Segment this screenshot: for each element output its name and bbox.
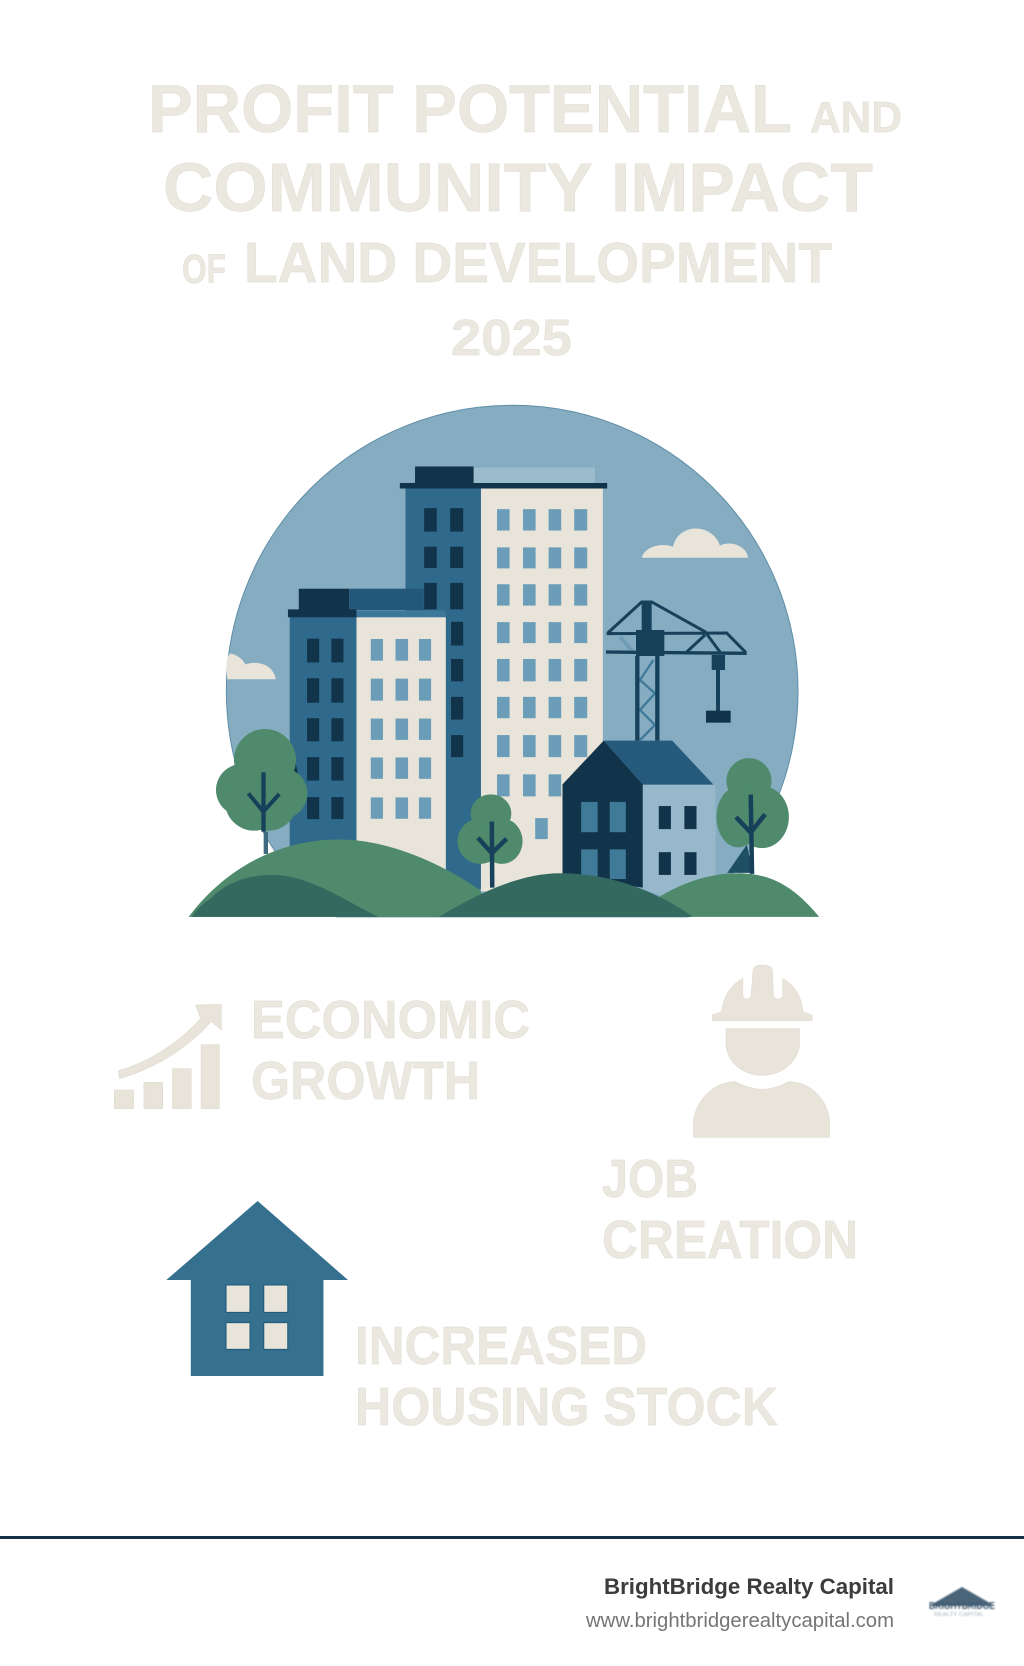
label: economic growth: ECONOMIC <box>251 990 530 1050</box>
label: increased housing stock <box>355 1316 778 1437</box>
label: increased housing stock: HOUSING STOCK <box>355 1377 778 1437</box>
title: OF <box>182 246 226 292</box>
cloud left <box>226 653 276 679</box>
title <box>148 71 902 366</box>
footer company name: BrightBridge Realty Capital <box>604 1574 894 1599</box>
title: LAND DEVELOPMENT <box>244 231 832 295</box>
label: economic growth <box>251 990 530 1111</box>
tree middle <box>458 794 523 888</box>
label: job creation: CREATION <box>602 1210 858 1270</box>
label: job creation: JOB <box>602 1149 698 1209</box>
city illustration <box>189 405 819 917</box>
small house <box>562 741 747 896</box>
label: job creation <box>602 1149 858 1270</box>
title: PROFIT POTENTIAL <box>148 71 792 147</box>
tree left <box>216 729 307 854</box>
icon: house <box>166 1201 348 1376</box>
title: COMMUNITY IMPACT <box>163 149 873 226</box>
cloud right <box>642 528 748 558</box>
icon: growth chart <box>114 1004 221 1109</box>
title: 2025 <box>451 309 572 366</box>
icon: construction worker <box>693 965 830 1137</box>
footer divider <box>0 1536 1024 1539</box>
crane <box>606 602 747 741</box>
label: economic growth: GROWTH <box>251 1051 480 1111</box>
left blue building <box>288 589 424 850</box>
footer logo: REALTY CAPITAL <box>934 1612 984 1618</box>
hills <box>189 839 819 917</box>
footer website: www.brightbridgerealtycapital.com <box>585 1610 894 1632</box>
cream mid building <box>356 610 446 872</box>
tall blue tower <box>400 466 607 889</box>
sky circle <box>226 405 798 917</box>
tree right <box>716 758 789 874</box>
title: AND <box>810 93 902 142</box>
footer logo <box>929 1587 995 1618</box>
label: increased housing stock: INCREASED <box>355 1316 647 1376</box>
footer logo: BRIGHTBRIDGE <box>929 1601 995 1612</box>
cream tower <box>481 488 603 891</box>
